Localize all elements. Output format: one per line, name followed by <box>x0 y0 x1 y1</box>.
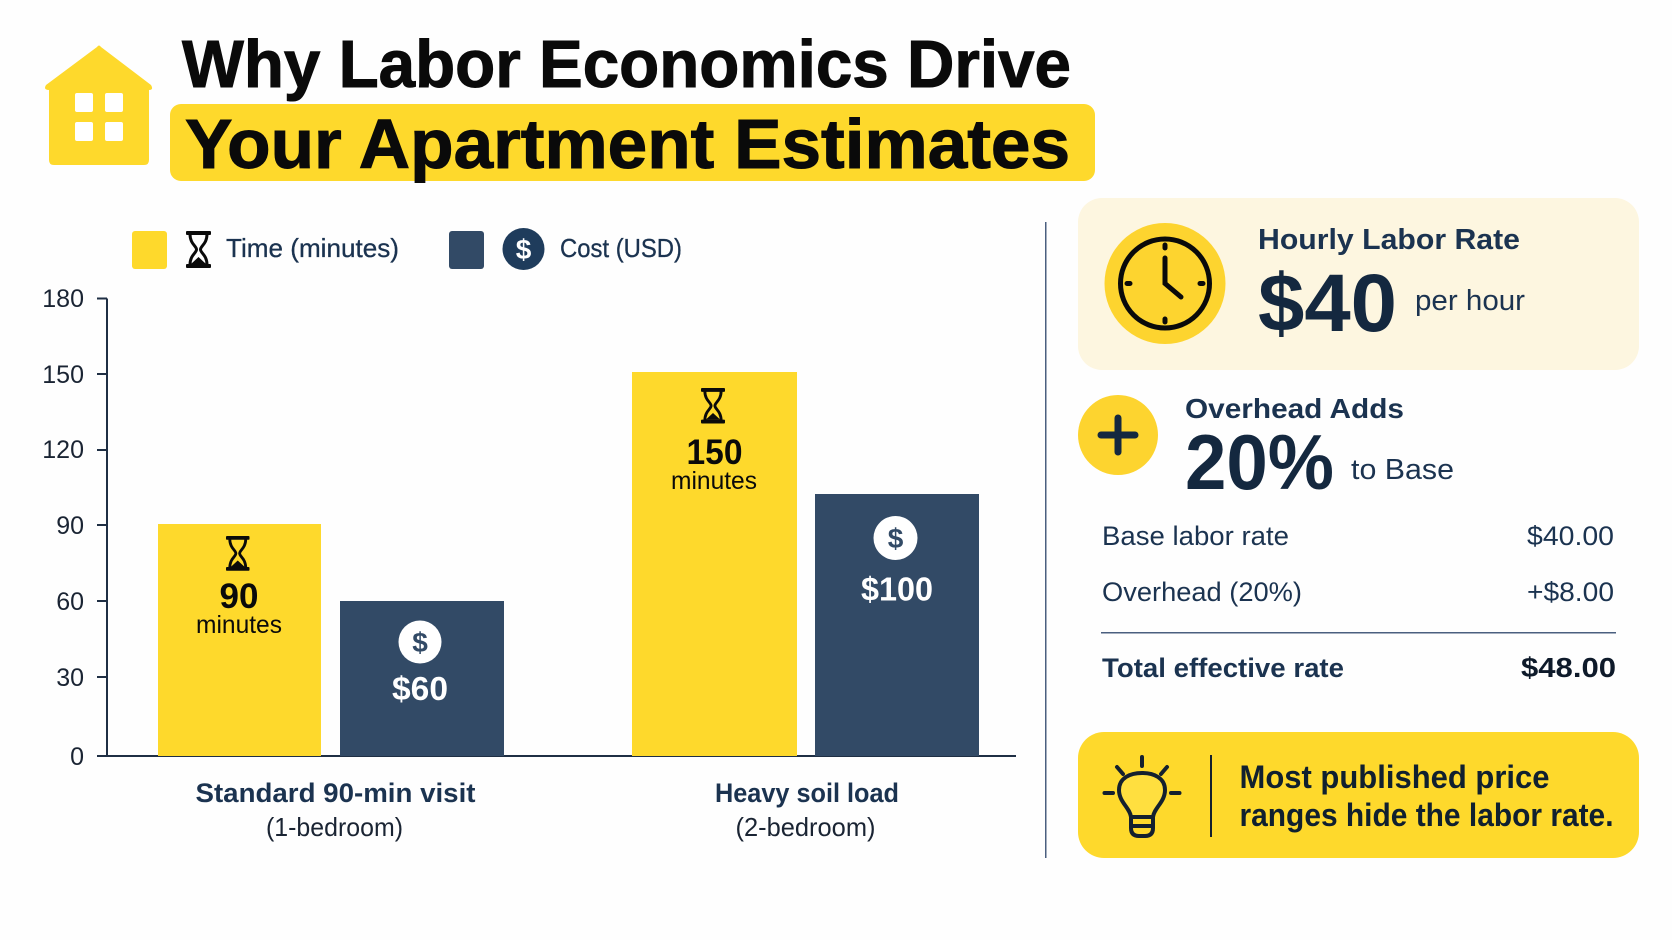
rate breakdown table <box>1101 521 1616 683</box>
category label: standard visit: (1-bedroom) <box>266 812 403 842</box>
unit: per hour: per hour <box>1415 285 1525 317</box>
panel heading: Hourly Labor Rate <box>1258 224 1520 256</box>
row: overhead <box>1102 577 1614 607</box>
title line 1: Why Labor Economics Drive <box>182 27 1071 102</box>
unit: minutes: minutes <box>196 611 282 639</box>
unit: to base: to Base <box>1351 454 1454 486</box>
icon: house <box>45 46 152 165</box>
category label: heavy soil <box>715 778 899 842</box>
icon: light bulb <box>1104 757 1180 836</box>
value: $100: $100 <box>861 570 933 608</box>
bar chart <box>42 285 1016 842</box>
icon: hourglass <box>226 536 250 571</box>
title highlight band <box>170 104 1095 181</box>
callout text: ranges hide the labor rate. <box>1240 797 1614 833</box>
category label: standard visit <box>196 778 476 842</box>
row: total <box>1102 652 1616 683</box>
icon: clock <box>1104 223 1226 344</box>
row: total: Total effective rate <box>1102 653 1344 683</box>
overhead heading: Overhead Adds <box>1185 393 1404 424</box>
value: 20%: 20% <box>1185 418 1334 506</box>
value: 90: 90 <box>220 577 258 616</box>
bar: heavy soil, time <box>632 372 797 756</box>
y axis labels: 180 <box>42 285 84 313</box>
icon: dollar <box>874 516 918 560</box>
bar: heavy soil, cost <box>815 494 979 756</box>
icon: hourglass <box>701 388 725 424</box>
icon: dollar <box>398 620 442 664</box>
legend label: cost: Cost (USD) <box>560 233 682 263</box>
panel: overhead <box>1078 393 1454 506</box>
icon: dollar: $ <box>412 627 428 658</box>
row: base labor rate: $40.00 <box>1527 521 1614 551</box>
legend swatch: time <box>132 231 167 269</box>
callout text <box>1240 759 1614 833</box>
row: overhead: Overhead (20%) <box>1102 577 1302 607</box>
icon: dollar: $ <box>888 523 904 554</box>
category label: standard visit: Standard 90-min visit <box>196 778 476 808</box>
y axis labels <box>42 285 84 771</box>
title line 2: Your Apartment Estimates <box>185 105 1070 183</box>
chart legend <box>132 228 682 270</box>
bar: standard visit, cost <box>340 601 504 756</box>
title <box>170 27 1095 183</box>
bar: standard visit, time <box>158 524 321 756</box>
y axis labels: 0 <box>70 743 84 771</box>
chart axes <box>97 298 1016 756</box>
icon: plus <box>1078 395 1158 475</box>
value: $60: $60 <box>392 670 448 707</box>
callout <box>1078 732 1639 858</box>
y axis labels: 90 <box>56 512 84 540</box>
legend swatch: cost <box>449 231 484 269</box>
category label: heavy soil: (2-bedroom) <box>736 812 876 842</box>
y axis labels: 30 <box>56 664 84 692</box>
value: 150: 150 <box>686 433 742 472</box>
category label: heavy soil: Heavy soil load <box>715 778 899 808</box>
value: $40: $40 <box>1258 258 1397 349</box>
row: base labor rate: Base labor rate <box>1102 521 1289 551</box>
y axis labels: 60 <box>56 588 84 616</box>
panel: hourly labor rate <box>1078 198 1639 370</box>
unit: minutes: minutes <box>671 467 757 495</box>
row: total: $48.00 <box>1521 652 1616 683</box>
row: overhead: +$8.00 <box>1527 577 1614 607</box>
y axis labels: 120 <box>42 436 84 464</box>
row: base labor rate <box>1102 521 1614 551</box>
y axis labels: 150 <box>42 361 84 389</box>
legend icon: hourglass <box>186 231 211 268</box>
callout text: Most published price <box>1240 759 1550 795</box>
legend icon: dollar <box>502 228 544 270</box>
legend label: time: Time (minutes) <box>226 233 399 263</box>
legend icon: dollar: $ <box>516 234 532 265</box>
